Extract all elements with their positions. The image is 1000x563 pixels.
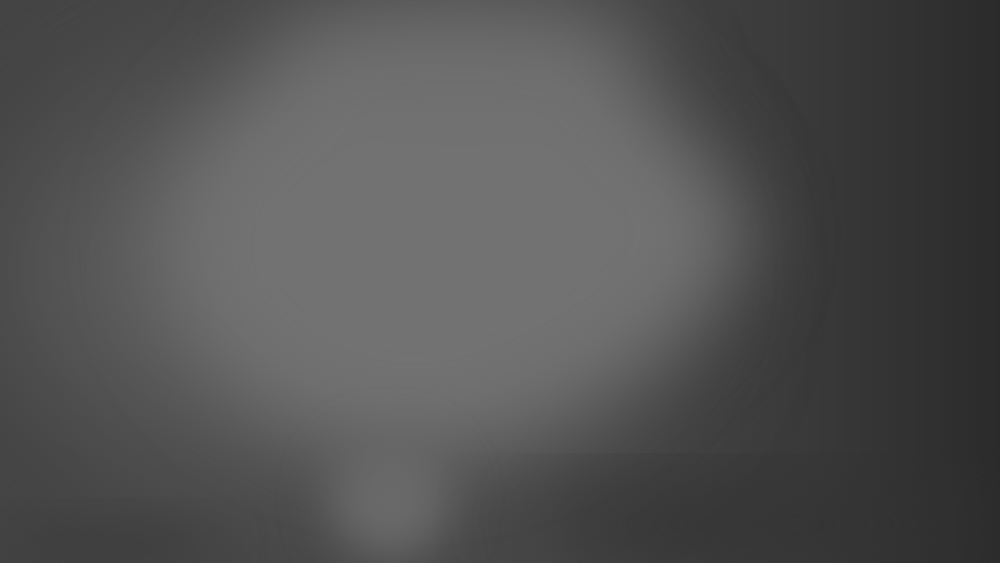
shadow: bottom left — [0, 527, 220, 563]
shadow: bottom right — [520, 489, 1000, 561]
glow: central blob — [160, 0, 750, 452]
glow: lower stem — [330, 440, 450, 560]
glow: soft outer skirt — [10, 60, 670, 480]
